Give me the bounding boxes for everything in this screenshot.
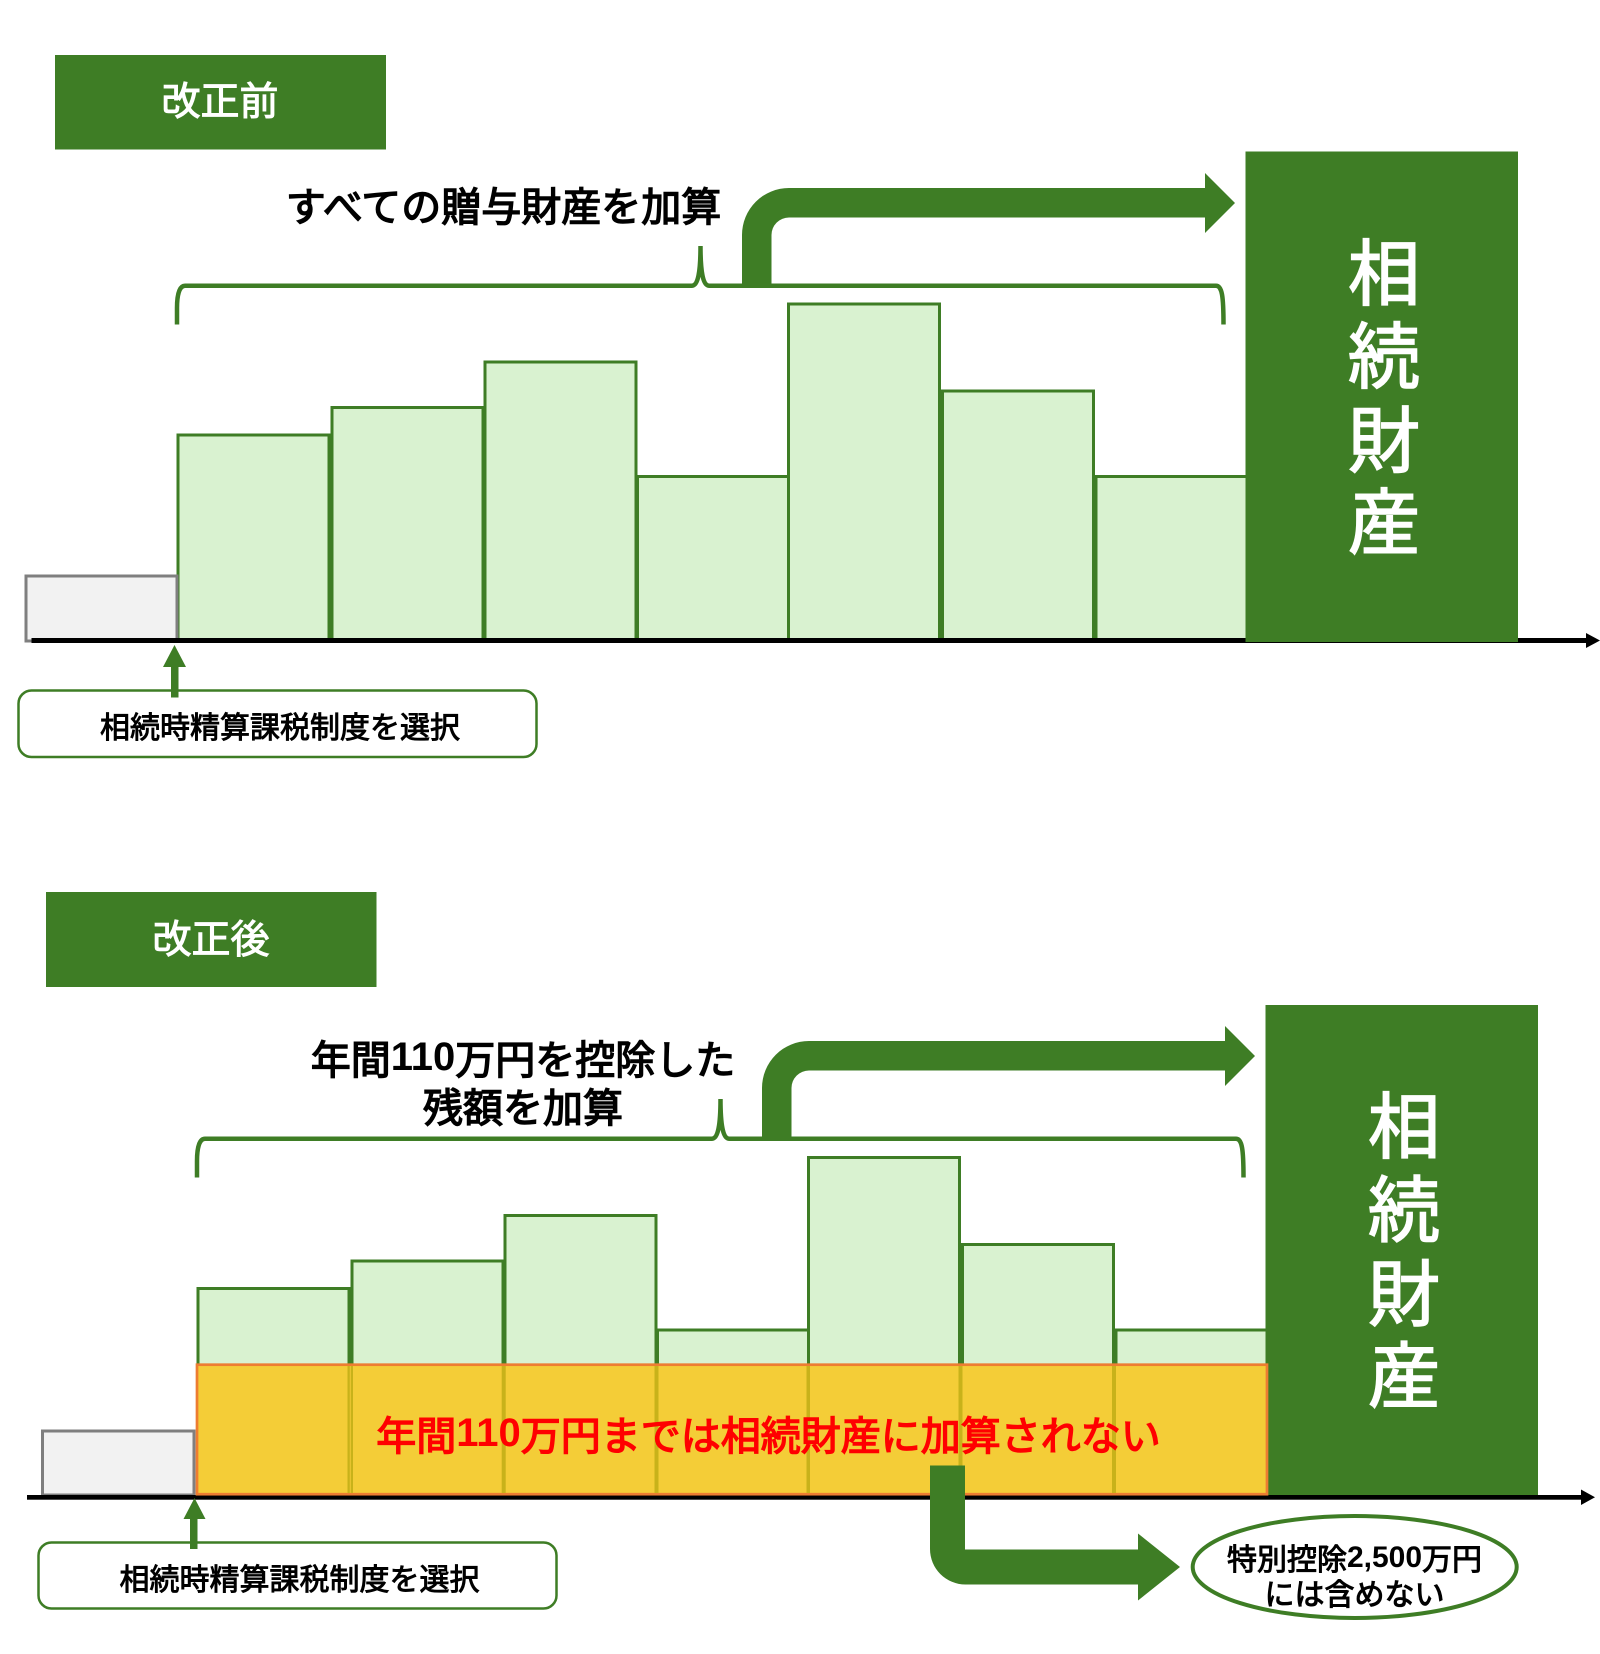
arrow: into inherited assets [742, 173, 1235, 285]
panel: inherited assets: 相 [1368, 1068, 1440, 1174]
brace [197, 1099, 1244, 1178]
panel: after revision [27, 892, 1595, 1618]
callout: settlement taxation [38, 1542, 556, 1608]
label: all gifted assets are added: すべての贈与財産を加算 [286, 175, 721, 233]
callout: settlement taxation: 相続時精算課税制度を選択 [120, 1555, 480, 1599]
panel: inherited assets: 相 [1348, 216, 1420, 320]
callout: settlement taxation [18, 690, 536, 757]
panel: inherited assets [1266, 1005, 1538, 1495]
band: annual 1.1M yen exemption [197, 1365, 1267, 1494]
panel: inherited assets: 産 [1348, 464, 1420, 570]
bar chart: gifts [178, 304, 1248, 641]
callout: settlement taxation: 相続時精算課税制度を選択 [100, 703, 460, 747]
timeline axis [27, 1490, 1595, 1505]
arrow: to special deduction [930, 1466, 1180, 1600]
callout: not included in special deduction: には含めない [1264, 1570, 1444, 1614]
panel: inherited assets: 続 [1368, 1152, 1440, 1257]
heading: before revision: 改正前 [161, 71, 279, 127]
callout: not included in special deduction [1193, 1516, 1517, 1618]
heading: after revision [46, 892, 376, 987]
heading: after revision: 改正後 [152, 909, 270, 965]
label: remainder after 1.1M yen is added: 年間110万円を控除した [311, 1028, 735, 1086]
panel: inherited assets: 産 [1368, 1318, 1440, 1423]
bar chart: gifts [198, 1158, 1268, 1494]
callout: not included in special deduction: 特別控除2,500万円 [1227, 1535, 1482, 1579]
panel: before revision [18, 55, 1600, 757]
label: remainder after 1.1M yen is added: 残額を加算 [423, 1076, 623, 1134]
gray bar: earlier period [26, 576, 177, 641]
label: remainder after 1.1M yen is added [311, 1028, 735, 1134]
timeline axis [32, 633, 1600, 648]
arrow: into inherited assets [762, 1026, 1255, 1138]
arrow: choice point [163, 645, 186, 698]
panel: inherited assets: 続 [1348, 298, 1420, 404]
arrow: choice point [184, 1498, 206, 1549]
brace [177, 246, 1224, 324]
gray bar: earlier period [42, 1431, 194, 1495]
panel: inherited assets [1246, 152, 1518, 642]
panel: inherited assets: 財 [1368, 1236, 1440, 1341]
panel: inherited assets: 財 [1348, 382, 1420, 488]
band: annual 1.1M yen exemption: 年間110万円までは相続財産に加算されない [376, 1404, 1161, 1462]
heading: before revision [55, 55, 386, 150]
